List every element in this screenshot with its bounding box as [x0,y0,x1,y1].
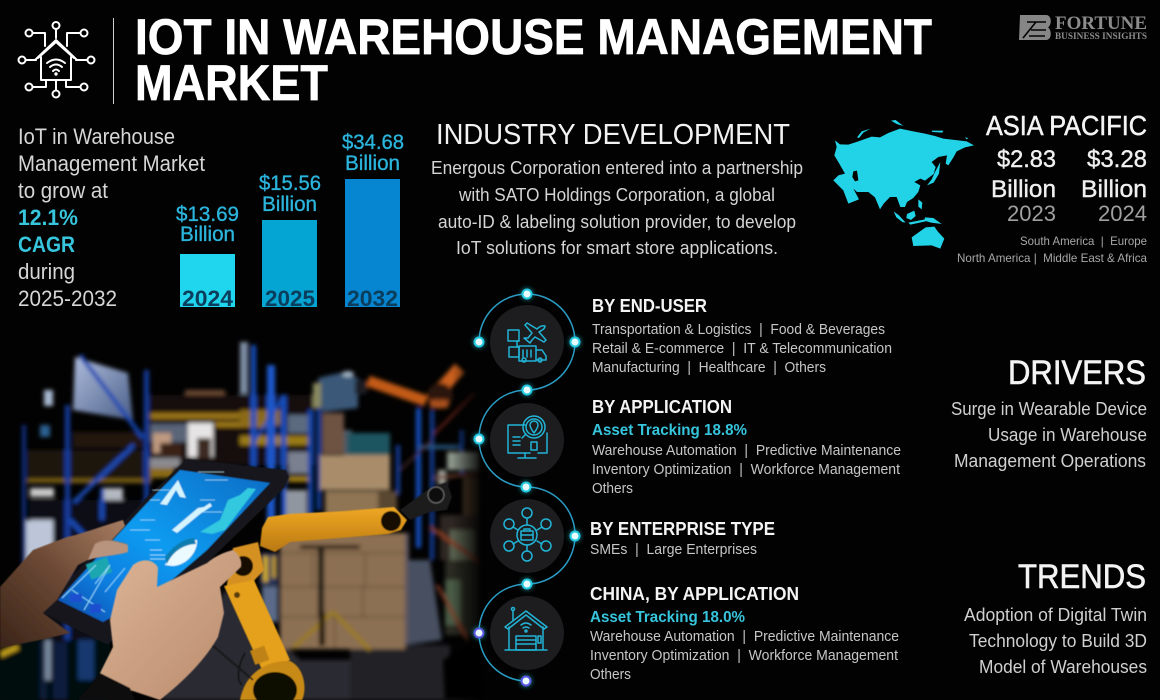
shelf backdrop [27,450,152,480]
industry development [431,119,803,258]
segment: china, by application: Others [590,667,631,683]
segment: by application [592,397,901,497]
hanging cloth [73,357,133,420]
asia pacific stats: ASIA PACIFIC [986,110,1147,141]
logo: Fortune Business Insights: BUSINESS INSIGHTS [1055,31,1147,41]
segment: china, by application: Inventory Optimization | Workforce Management [590,648,898,664]
right hand shelves [447,452,480,470]
drivers [951,354,1147,471]
trends: Adoption of Digital Twin [964,605,1147,625]
segment: by end-user: Retail & E-commerce | IT & Telecommunication [592,341,892,357]
segment: by end-user: BY END-USER [592,296,707,316]
growth text: 12.1% [18,205,78,230]
right fade [452,330,484,700]
trends: TRENDS [1018,558,1146,596]
bar chart [176,131,404,311]
bar chart: Billion [262,193,317,216]
segment: china, by application: CHINA, BY APPLICATION [590,584,799,604]
asia pacific stats: North America | Middle East & Africa [957,251,1147,265]
segment: by application: Inventory Optimization | Workforce Management [592,462,900,478]
lower left dark [0,640,110,700]
blue racks [22,425,26,640]
growth text: during [18,259,75,284]
goods on shelves [150,424,190,442]
blue housing and orange robot [318,373,358,412]
title: IOT IN WAREHOUSE MANAGEMENT [135,9,932,65]
logo: Fortune Business Insights [1019,14,1147,41]
growth text: CAGR [18,232,75,257]
icon: smart warehouse [490,596,564,670]
segment: by enterprise type: BY ENTERPRISE TYPE [590,519,775,539]
industry development: IoT solutions for smart store applications. [456,238,778,258]
growth text: 2025-2032 [18,286,117,311]
connector nodes [473,288,581,687]
asia pacific stats [957,110,1147,265]
icon: logistics [490,305,564,379]
bar chart: $15.56 [259,172,321,195]
small items beneath arm [260,553,278,585]
asia pacific stats: Billion [991,176,1056,203]
tablet screen graphics [160,480,212,533]
drivers: Management Operations [954,451,1146,471]
segment: china, by application: Warehouse Automation | Predictive Maintenance [590,629,899,645]
growth text [18,124,205,311]
icon: smart home network [18,22,94,98]
industry development: Energous Corporation entered into a partnership [431,158,803,178]
bar chart: $34.68 [342,131,404,154]
segment: by end-user: Manufacturing | Healthcare | Others [592,360,826,376]
segment: china, by application [590,584,899,683]
asia pacific stats: 2024 [1098,201,1147,226]
growth text: IoT in Warehouse [18,124,175,149]
bar chart: Billion [180,223,235,246]
segment: by end-user: Transportation & Logistics | Food & Beverages [592,322,885,338]
asia pacific stats: $2.83 [997,146,1056,173]
hands [0,520,241,700]
segment: by end-user [592,296,892,376]
industry development: with SATO Holdings Corporation, a global [458,185,775,205]
asia pacific stats: 2023 [1007,201,1056,226]
segment: by enterprise type [590,519,775,558]
bar chart: Billion [345,152,400,175]
photo: warehouse with tablet and robot arm [0,330,488,700]
floor [160,590,480,700]
segment: china, by application: Asset Tracking 18.0% [590,609,745,626]
yellow robot arm [260,507,407,552]
trends: Model of Warehouses [979,657,1147,677]
icon: enterprise network [490,499,564,573]
segment: by application: Asset Tracking 18.8% [592,422,747,439]
segment: by application: Others [592,481,633,497]
growth text: Management Market [18,151,205,176]
bar chart: 2032 [347,286,398,311]
connector arcs [479,294,575,681]
asia pacific stats: $3.28 [1087,146,1147,173]
yellow shelf beams [150,413,255,419]
title [135,9,932,111]
logo: Fortune Business Insights: FORTUNE [1055,14,1147,34]
map: Asia Pacific [833,120,974,249]
drivers: DRIVERS [1008,354,1146,392]
segment: by application: BY APPLICATION [592,397,732,417]
tablet [43,459,289,645]
segment: by application: Warehouse Automation | Predictive Maintenance [592,443,901,459]
industry development: auto-ID & labeling solution provider, to develop [438,212,796,232]
segment: by enterprise type: SMEs | Large Enterprises [590,542,757,558]
bar chart: 2025 [265,286,315,311]
trends: Technology to Build 3D [969,631,1147,651]
asia pacific stats: Billion [1081,176,1147,203]
asia pacific stats: South America | Europe [1020,234,1147,248]
divider [112,18,114,104]
robot gripper [212,482,452,700]
stacked boxes [320,455,390,490]
drivers: Surge in Wearable Device [951,399,1147,419]
industry development: INDUSTRY DEVELOPMENT [436,119,790,151]
trends [964,558,1147,677]
bar chart: 2024 [182,286,234,311]
growth text: to grow at [18,178,108,203]
icon: asset tracking [490,403,564,477]
drivers: Usage in Warehouse [988,425,1147,445]
title: MARKET [135,55,328,111]
bar chart: $13.69 [176,203,239,226]
